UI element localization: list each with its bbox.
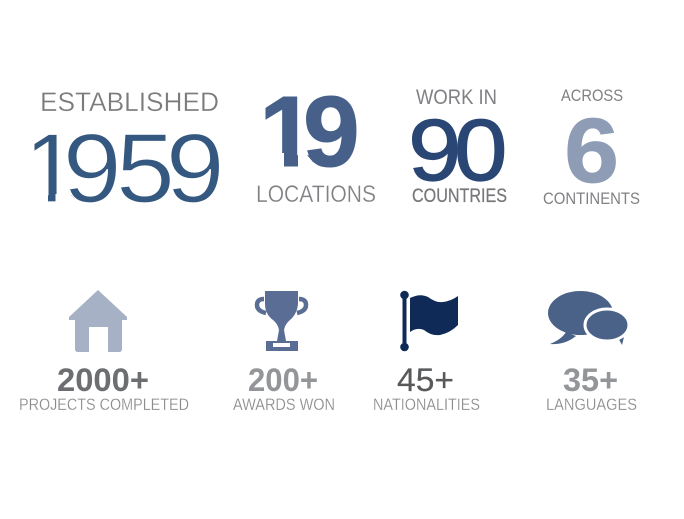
number: 45+: 45+ (397, 362, 454, 398)
number: 90: 90 (408, 102, 507, 199)
number: 2000+: 2000+ (57, 362, 149, 398)
stat: nationalities (373, 291, 480, 414)
number: 200+: 200+ (248, 362, 318, 398)
label: awards won: AWARDS WON (233, 395, 335, 414)
number: 19: 19 (259, 77, 360, 188)
icon: house (69, 290, 127, 352)
stat: work in 90 countries (408, 86, 507, 207)
icon: flag (400, 291, 458, 351)
icon: speech bubbles (548, 291, 629, 345)
label: nationalities: NATIONALITIES (373, 395, 480, 414)
label: projects completed: PROJECTS COMPLETED (19, 395, 189, 414)
label: work in: WORK IN (416, 86, 497, 109)
stat: 19 locations (258, 96, 375, 202)
stat: established 1959 (34, 92, 219, 202)
number: 6: 6 (564, 100, 619, 202)
label: locations: LOCATIONS (256, 181, 376, 208)
stat: languages (546, 291, 637, 414)
label: countries: COUNTRIES (412, 186, 507, 207)
infographic (20, 90, 640, 410)
stat: across 6 continents (543, 86, 640, 208)
label: languages: LANGUAGES (546, 395, 637, 414)
stat: awards won (233, 291, 335, 414)
number: 1959: 1959 (21, 114, 225, 223)
label: established: ESTABLISHED (40, 87, 219, 117)
icon: trophy (257, 291, 306, 351)
label: across: ACROSS (561, 86, 623, 105)
number: 35+: 35+ (563, 362, 618, 398)
label: continents: CONTINENTS (543, 189, 640, 208)
stat: projects completed (19, 290, 189, 414)
